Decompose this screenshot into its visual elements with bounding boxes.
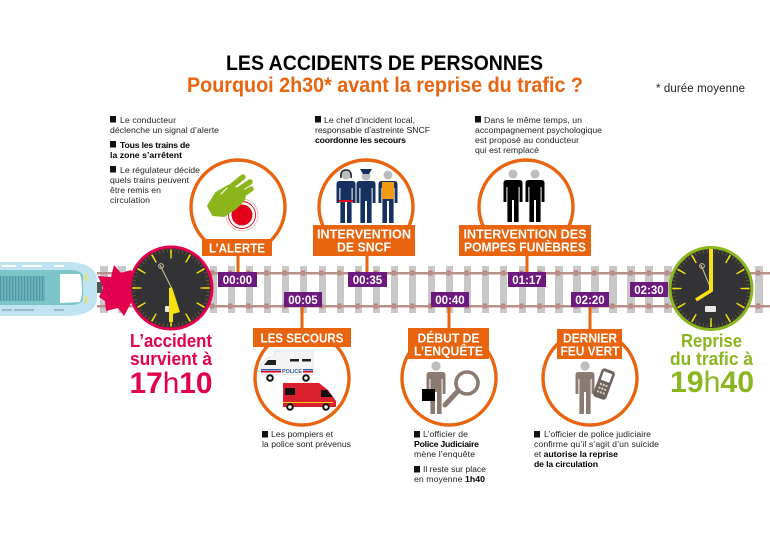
text: enquête: en moyenne 1h40: [414, 474, 485, 484]
clock: resumption: [670, 248, 752, 330]
time marker 00:35: [348, 272, 387, 287]
title: LES ACCIDENTS DE PERSONNES: [226, 51, 543, 75]
panel: début de l'enquête: [402, 307, 496, 425]
text: alerte: circulation: [110, 195, 150, 205]
resumption time label: 19h40: [670, 366, 754, 399]
footnote: * durée moyenne: [656, 83, 745, 95]
text: secours: la police sont prévenus: [262, 439, 352, 449]
accident time label: survient à: [130, 348, 213, 369]
panel: les secours: [253, 307, 351, 425]
text: enquête: Police Judiciaire: [414, 439, 479, 449]
text: alerte: quels trains peuvent: [110, 175, 190, 185]
text: secours: Les pompiers et: [271, 429, 334, 439]
panel: dernier feu vert: [543, 307, 637, 425]
panel: dernier feu vert: FEU VERT: [560, 344, 620, 358]
text: enquête: Il reste sur place: [423, 464, 486, 474]
panel: intervention SNCF: INTERVENTION: [317, 226, 411, 242]
text: SNCF: Le chef d’incident local,: [324, 115, 415, 125]
resumption time label: [670, 330, 754, 399]
panel: intervention SNCF: [313, 160, 415, 273]
time marker 00:05: [284, 292, 322, 307]
time marker 02:20: [571, 292, 609, 307]
panel: pompes funèbres: INTERVENTION DES: [464, 226, 587, 242]
text: dernier feu vert: de la circulation: [534, 459, 598, 469]
text: SNCF: [315, 115, 430, 145]
icon: investigator with magnifier: [422, 361, 478, 414]
time marker 00:40: 00:40: [435, 295, 465, 307]
panel: début de l'enquête: L’ENQUÊTE: [414, 344, 483, 358]
time marker 00:40: [431, 292, 469, 307]
text: alerte: Le régulateur décide: [120, 165, 200, 175]
text: alerte: déclenche un signal d’alerte: [110, 125, 219, 135]
text: pompes funèbres: accompagnement psychologique: [475, 125, 602, 135]
panel: intervention SNCF: DE SNCF: [337, 240, 391, 254]
train: [0, 262, 97, 316]
text: dernier feu vert: L’officier de police judiciaire: [544, 429, 651, 439]
text: pompes funèbres: qui est remplacé: [475, 145, 539, 155]
text: pompes funèbres: Dans le même temps, un: [484, 115, 582, 125]
clock: accident: [130, 247, 212, 329]
text: alerte: Tous les trains de: [120, 140, 190, 150]
panel: pompes funèbres: POMPES FUNÈBRES: [464, 240, 586, 254]
resumption time label: Reprise: [681, 330, 742, 351]
icon: fire truck: [283, 383, 336, 410]
accident time label: L’accident: [130, 330, 212, 351]
time marker 00:00: [218, 272, 257, 287]
panel: alerte: L’ALERTE: [209, 240, 265, 256]
time marker 00:35: 00:35: [353, 275, 383, 287]
icon: two men in suits: [504, 170, 544, 222]
resumption time label: du trafic à: [670, 348, 754, 369]
time marker 02:30: [630, 282, 668, 297]
time marker 02:20: 02:20: [575, 295, 605, 307]
text: dernier feu vert: [534, 429, 659, 469]
text: alerte: Le conducteur: [120, 115, 176, 125]
text: secours: [262, 429, 352, 449]
accident time label: [130, 330, 213, 400]
text: dernier feu vert: confirme qu’il s’agit d’un suicide: [534, 439, 659, 449]
time marker 02:30: 02:30: [634, 285, 664, 297]
panel: les secours: LES SECOURS: [260, 330, 344, 346]
text: pompes funèbres: est proposé au conducteur: [475, 135, 579, 145]
text: enquête: mène l’enquête: [414, 449, 475, 459]
text: alerte: [110, 115, 219, 205]
accident time label: 17h10: [130, 367, 212, 400]
panel: début de l'enquête: DÉBUT DE: [418, 330, 480, 346]
text: SNCF: responsable d’astreinte SNCF: [315, 125, 430, 135]
time marker 01:17: [508, 272, 546, 287]
time marker 00:00: 00:00: [223, 275, 252, 287]
title: Pourquoi 2h30* avant la reprise du trafic ?: [187, 74, 583, 97]
icon: three responders: [336, 169, 398, 223]
text: SNCF: coordonne les secours: [315, 135, 406, 145]
panel: dernier feu vert: DERNIER: [563, 330, 618, 346]
train coupler: [97, 282, 102, 293]
text: pompes funèbres: [475, 115, 602, 155]
text: enquête: L’officier de: [423, 429, 468, 439]
time marker 00:05: 00:05: [288, 295, 318, 307]
icon: officer with phone: [576, 361, 616, 414]
text: alerte: la zone s’arrêtent: [110, 150, 182, 160]
title: [187, 51, 583, 97]
icon: collision burst: [98, 265, 142, 316]
time marker 01:17: 01:17: [512, 275, 542, 287]
icon: hand on alarm button: [208, 177, 258, 231]
text: enquête: [414, 429, 486, 484]
icon: police van: POLICE: [282, 369, 303, 375]
text: dernier feu vert: et autorise la reprise: [534, 449, 618, 459]
panel: alerte: [191, 160, 285, 273]
panel: pompes funèbres: [459, 160, 591, 273]
text: alerte: être remis en: [110, 185, 161, 195]
railway track: [97, 266, 770, 313]
